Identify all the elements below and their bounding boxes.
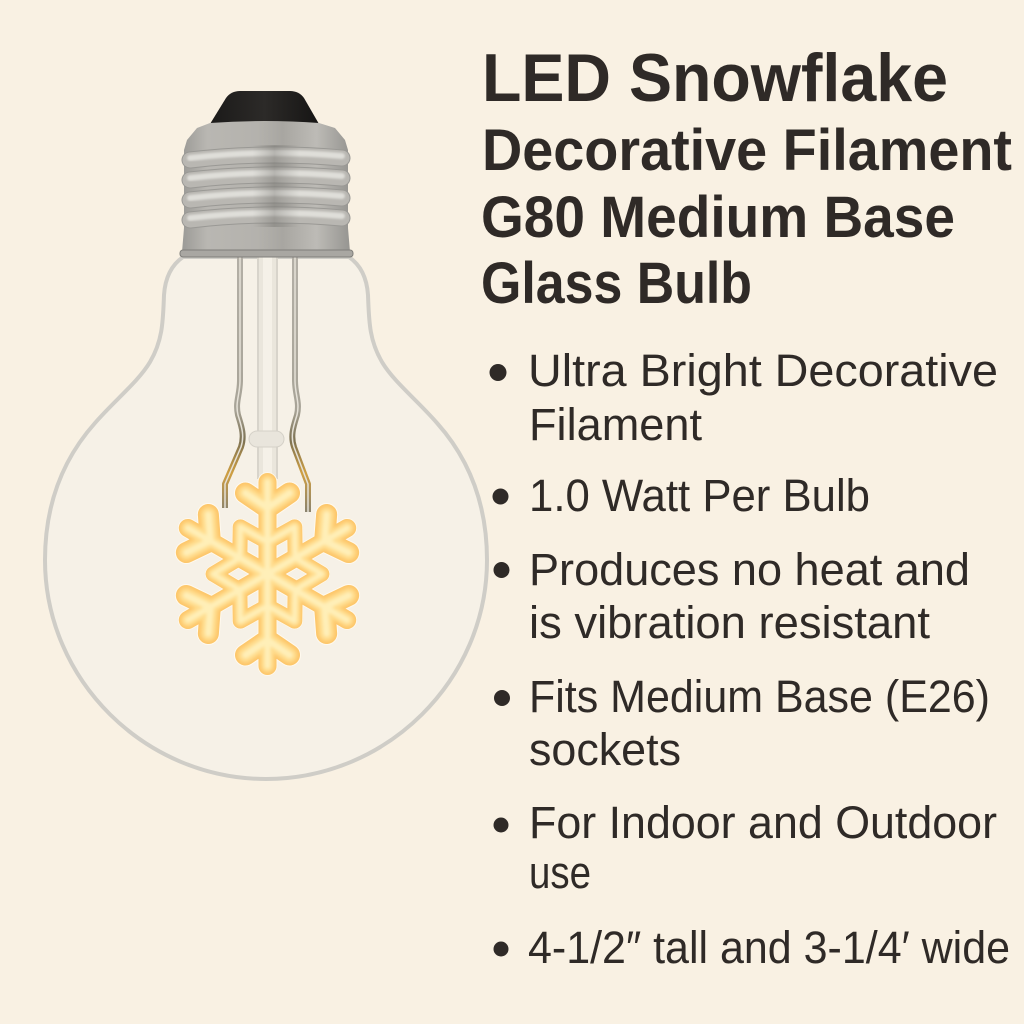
bullet: no heat <box>494 544 970 648</box>
metal shell <box>182 121 350 252</box>
bullet: socket fit <box>494 671 990 775</box>
bullet: no heat: Produces no heat and <box>529 544 970 595</box>
bullet: dimensions: 4-1/2″ tall and 3-1/4′ wide <box>528 922 1010 973</box>
snowflake filament <box>174 482 361 666</box>
bullet: ultra bright <box>490 345 998 450</box>
glass stem <box>249 256 284 478</box>
bullet list <box>490 345 1010 973</box>
bullet: socket fit: sockets <box>529 724 681 775</box>
title: Decorative Filament <box>482 118 1012 183</box>
bullet: indoor outdoor <box>494 797 997 898</box>
title <box>481 40 1012 316</box>
metal screw base <box>180 91 353 257</box>
title: LED Snowflake <box>482 40 948 116</box>
black contact tip <box>210 91 319 124</box>
title: G80 Medium Base <box>481 185 955 250</box>
screw threads <box>190 153 342 220</box>
filament support wires <box>225 256 308 512</box>
bullet: indoor outdoor: use <box>529 847 591 898</box>
bullet: ultra bright: Ultra Bright Decorative <box>528 345 998 396</box>
thread sheen <box>182 145 350 227</box>
glass globe <box>45 257 487 779</box>
bullet: ultra bright: Filament <box>529 399 702 450</box>
base collar <box>180 250 353 257</box>
title: Glass Bulb <box>481 251 752 316</box>
bullet: indoor outdoor: For Indoor and Outdoor <box>529 797 997 848</box>
light bulb illustration <box>45 91 487 779</box>
bullet: no heat: is vibration resistant <box>529 597 930 648</box>
bullet: wattage: 1.0 Watt Per Bulb <box>529 470 870 521</box>
bullet: socket fit: Fits Medium Base (E26) <box>529 671 990 722</box>
